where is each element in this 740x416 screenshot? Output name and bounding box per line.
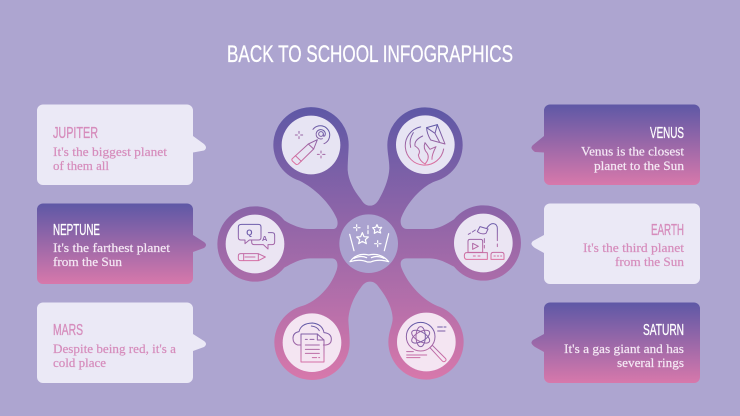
icon: question and answer [226, 215, 284, 273]
panel: Jupiter: JUPITER [53, 125, 98, 142]
panel: Earth: from the Sun [615, 255, 685, 269]
icon: globe and graduation cap [396, 115, 455, 174]
panel: Venus: VENUS [650, 125, 684, 142]
panel: Jupiter [37, 104, 206, 185]
icon: atom under magnifying glass [397, 313, 456, 371]
central diagram [217, 107, 521, 380]
panel: Mars: cold place [53, 356, 106, 370]
panel: Mars: MARS [53, 322, 83, 339]
title: BACK TO SCHOOL INFOGRAPHICS [227, 41, 513, 68]
panel: Earth [531, 204, 700, 284]
blob connector shape [217, 107, 521, 380]
panel: Saturn: SATURN [643, 322, 684, 339]
panel: Neptune: NEPTUNE [53, 222, 100, 239]
panel: Neptune: from the Sun [53, 255, 123, 269]
panel: Venus [531, 104, 700, 185]
icon: lamp, tablet and books [454, 214, 513, 272]
icon: open book with stars [339, 214, 398, 273]
icon: question and answer: Q [246, 228, 252, 237]
panel: Jupiter: of them all [53, 159, 110, 173]
panel: Venus: Venus is the closest [581, 144, 685, 158]
icon: cloud and document [283, 313, 341, 372]
icon: pencil and at sign [282, 116, 340, 174]
panel: Earth: EARTH [651, 222, 684, 239]
panel: Earth: It's the third planet [583, 241, 685, 255]
panel: Saturn: several rings [617, 356, 684, 370]
panel: Saturn: It's a gas giant and has [564, 342, 684, 356]
panel: Mars: Despite being red, it's a [53, 342, 176, 356]
panel: Venus: planet to the Sun [594, 159, 685, 173]
icon: question and answer: A [262, 234, 268, 243]
panel: Jupiter: It's the biggest planet [53, 145, 168, 159]
panel: Mars [37, 302, 206, 383]
panel: Neptune: It's the farthest planet [53, 241, 171, 255]
panel: Neptune [37, 204, 206, 284]
panel: Saturn [531, 302, 700, 383]
